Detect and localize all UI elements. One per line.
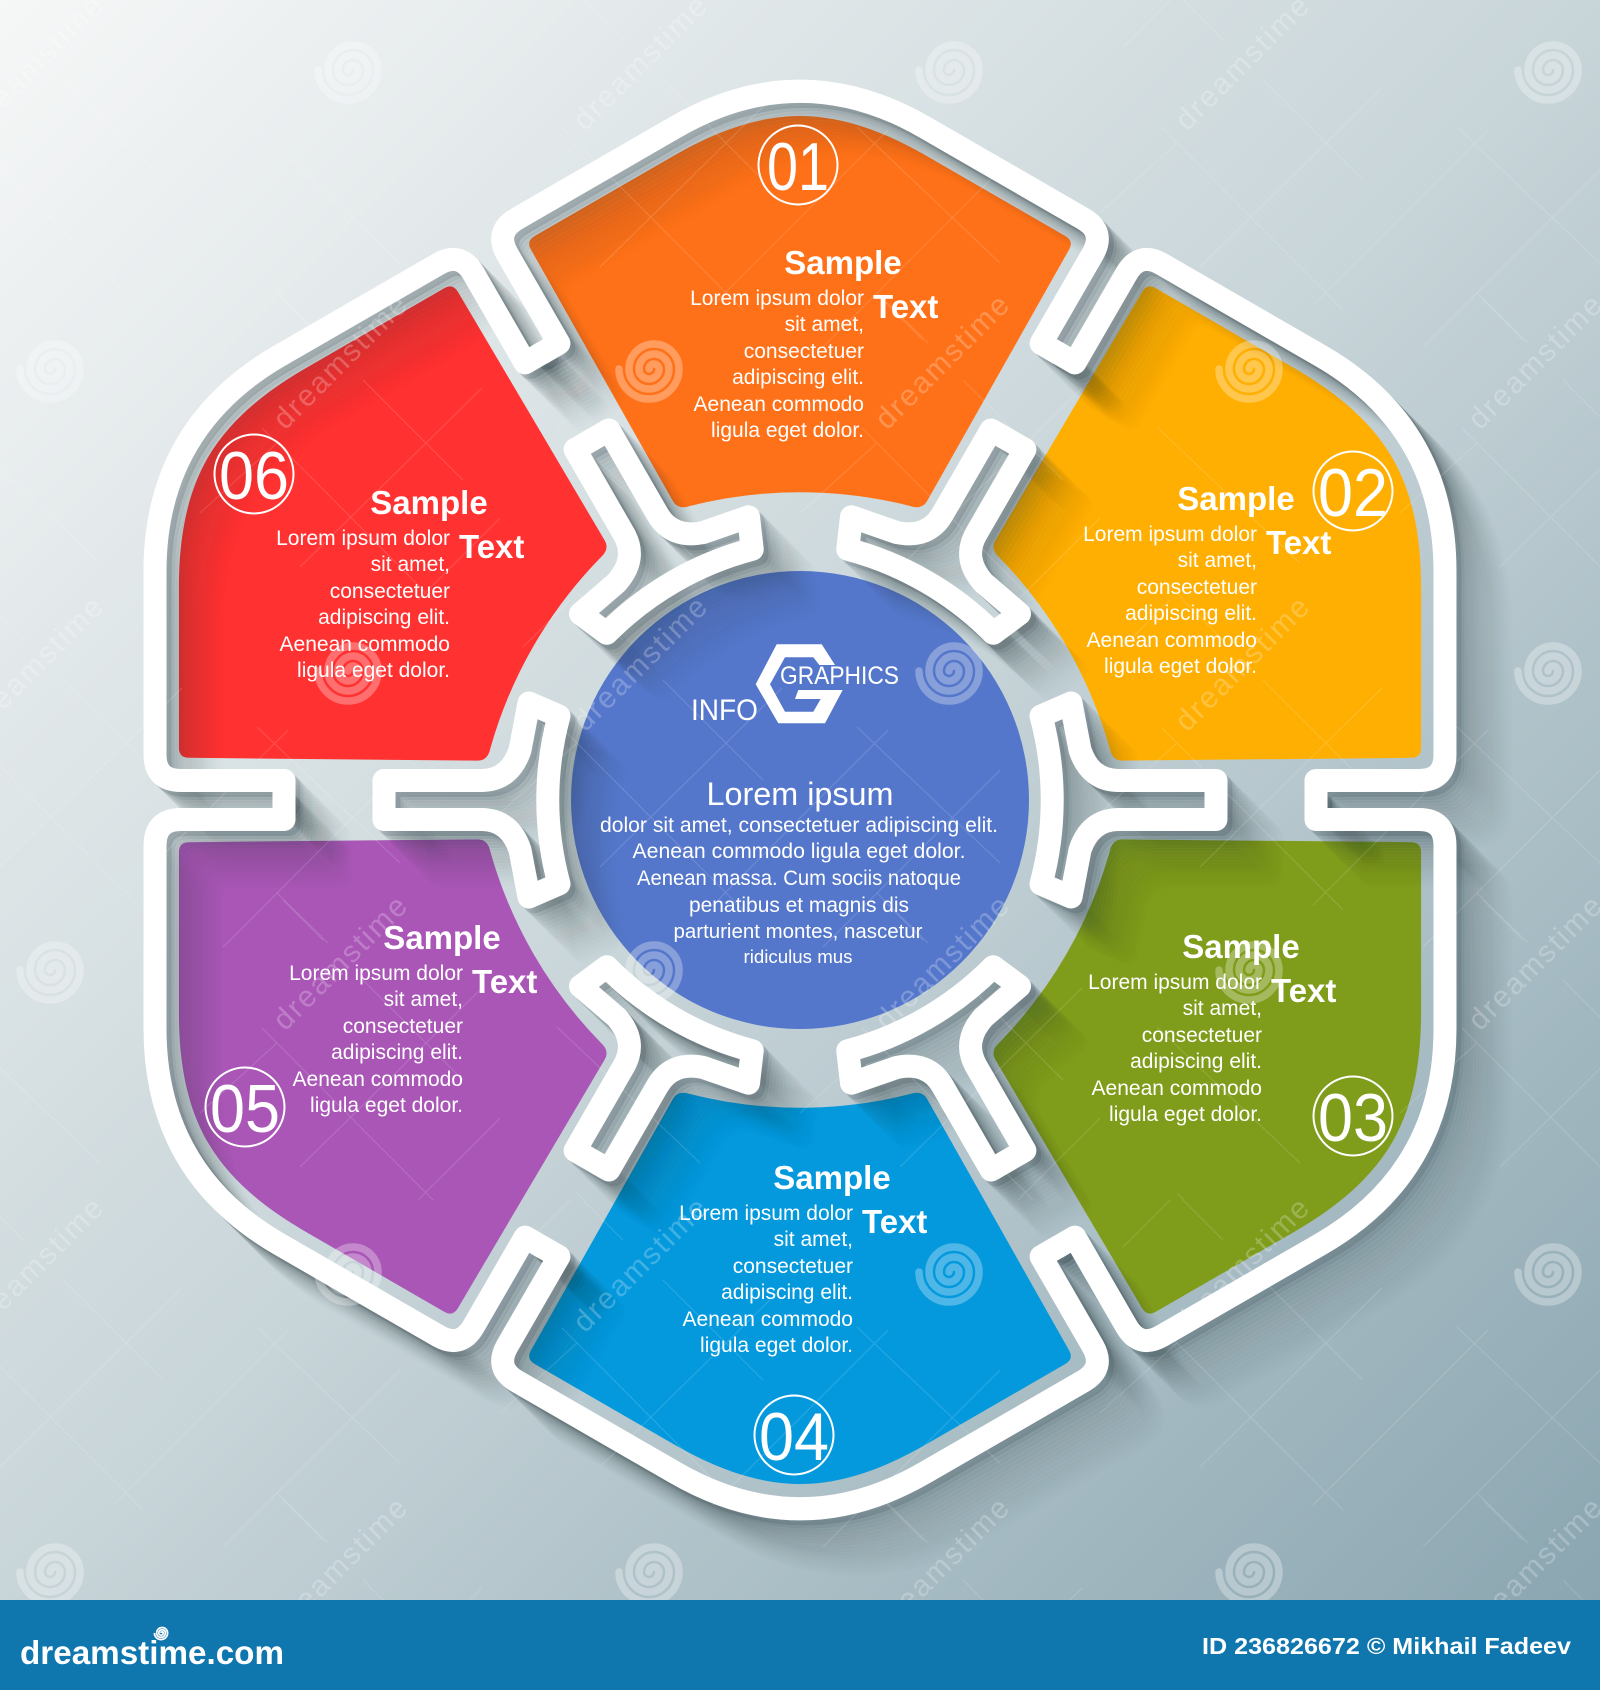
panel text: Sample	[370, 484, 488, 521]
panel text: ligula eget dolor.	[297, 659, 450, 682]
panel text: consectetuer	[330, 580, 450, 603]
watermark text: dreamstime	[567, 591, 714, 738]
watermark text: dreamstime	[267, 1492, 414, 1639]
panel text: adipiscing elit.	[721, 1281, 853, 1304]
panel text: ligula eget dolor.	[1109, 1103, 1262, 1126]
panel text: adipiscing elit.	[318, 606, 450, 629]
panel text: sit amet,	[1183, 997, 1262, 1020]
watermark text: dreamstime	[869, 1492, 1016, 1639]
inner Y connectors	[384, 391, 1216, 1209]
panel text	[1083, 480, 1331, 678]
panel text: Sample	[773, 1159, 891, 1196]
panel text: Lorem ipsum dolor	[1088, 971, 1262, 994]
panel text: sit amet,	[384, 988, 463, 1011]
panel text	[289, 919, 537, 1117]
number badge 03: 03	[1318, 1080, 1388, 1156]
watermark text: dreamstime	[567, 1192, 714, 1339]
panel 03 content	[1088, 928, 1392, 1156]
panel text: Text	[1266, 524, 1331, 561]
number badge 06: 06	[219, 438, 289, 514]
watermark text: dreamstime	[267, 890, 414, 1037]
footer credit: ID 236826672 © Mikhail Fadeev	[1202, 1633, 1571, 1659]
watermark text: dreamstime	[869, 890, 1016, 1037]
panel text: Text	[862, 1203, 927, 1240]
watermark text: dreamstime	[1169, 1192, 1316, 1339]
panel text: Aenean commodo	[1087, 629, 1257, 652]
number badge 05: 05	[210, 1071, 280, 1147]
panel text: consectetuer	[1142, 1024, 1262, 1047]
icon: infographics G logo	[756, 644, 843, 723]
panel fill 05 purple	[72, 712, 682, 1377]
panel text: Sample	[784, 244, 902, 281]
panel text	[690, 244, 938, 442]
panel text: adipiscing elit.	[1125, 602, 1257, 625]
panel text: sit amet,	[785, 313, 864, 336]
panel text: ligula eget dolor.	[1104, 655, 1257, 678]
panel text: sit amet,	[774, 1228, 853, 1251]
panel text: Text	[472, 963, 537, 1000]
panel text: consectetuer	[343, 1015, 463, 1038]
logo word INFO: INFO	[691, 694, 758, 727]
panel text	[1088, 928, 1336, 1126]
panel: centre text	[600, 644, 998, 967]
panel text: Text	[1271, 972, 1336, 1009]
panel text: consectetuer	[733, 1255, 853, 1278]
panel text: Lorem ipsum dolor	[679, 1202, 853, 1225]
centre body text	[600, 814, 998, 967]
centre body text: parturient montes, nascetur	[674, 921, 923, 943]
footer background	[0, 1600, 1600, 1690]
panel text: adipiscing elit.	[331, 1041, 463, 1064]
panel text: sit amet,	[371, 553, 450, 576]
panel text: Lorem ipsum dolor	[1083, 523, 1257, 546]
footer logo spiral	[154, 1628, 168, 1640]
centre body text: penatibus et magnis dis	[689, 894, 909, 917]
panel text: ligula eget dolor.	[711, 419, 864, 442]
number badge 01: 01	[767, 129, 829, 205]
panel text: Lorem ipsum dolor	[276, 527, 450, 550]
panel 02 content	[1083, 452, 1392, 678]
centre body text: dolor sit amet, consectetuer adipiscing elit.	[600, 814, 998, 837]
panel text: Aenean commodo	[293, 1068, 463, 1091]
panel text: Text	[459, 528, 524, 565]
panel text: Aenean commodo	[683, 1308, 853, 1331]
centre heading: Lorem ipsum	[706, 776, 894, 812]
panel text: Aenean commodo	[1092, 1077, 1262, 1100]
panel text: Lorem ipsum dolor	[289, 962, 463, 985]
panel 06 content	[214, 434, 524, 682]
footer bar	[0, 1600, 1600, 1690]
panel text: Aenean commodo	[280, 633, 450, 656]
panel 04 content	[679, 1159, 927, 1475]
panel text: Text	[873, 288, 938, 325]
panel text: Sample	[383, 919, 501, 956]
panel text: adipiscing elit.	[1130, 1050, 1262, 1073]
watermark text: dreamstime	[869, 289, 1016, 436]
centre body text: Aenean commodo ligula eget dolor.	[632, 840, 966, 863]
panel fill 06 red	[72, 223, 682, 888]
white outline frame	[37, 91, 1563, 1509]
panel text: sit amet,	[1178, 549, 1257, 572]
centre body text: Aenean massa. Cum sociis natoque	[637, 867, 961, 890]
watermark text: dreamstime	[1169, 591, 1316, 738]
panel fill 01 orange	[529, 116, 1071, 507]
panel text: adipiscing elit.	[732, 366, 864, 389]
panel fill 04 blue	[529, 1093, 1071, 1484]
panel text: Lorem ipsum dolor	[690, 287, 864, 310]
panel text: consectetuer	[1137, 576, 1257, 599]
watermark text: dreamstime	[267, 289, 414, 436]
panel text: ligula eget dolor.	[700, 1334, 853, 1357]
footer logo: dreamstime.com	[20, 1634, 284, 1671]
panel fill 03 green	[918, 712, 1528, 1377]
panel fill 02 yellow	[918, 223, 1528, 888]
panel text: Sample	[1182, 928, 1300, 965]
panel text: Aenean commodo	[694, 393, 864, 416]
panel text	[276, 484, 524, 682]
number badge 02: 02	[1318, 455, 1388, 531]
panel text: Sample	[1177, 480, 1295, 517]
logo word GRAPHICS: GRAPHICS	[780, 662, 899, 690]
panel 05 content	[206, 919, 537, 1147]
panel text: ligula eget dolor.	[310, 1094, 463, 1117]
centre body text: ridiculus mus	[744, 947, 852, 967]
centre disc	[571, 571, 1029, 1029]
panel text: consectetuer	[744, 340, 864, 363]
number badge 04: 04	[759, 1399, 829, 1475]
panel 01 content	[690, 126, 938, 442]
panel text	[679, 1159, 927, 1357]
